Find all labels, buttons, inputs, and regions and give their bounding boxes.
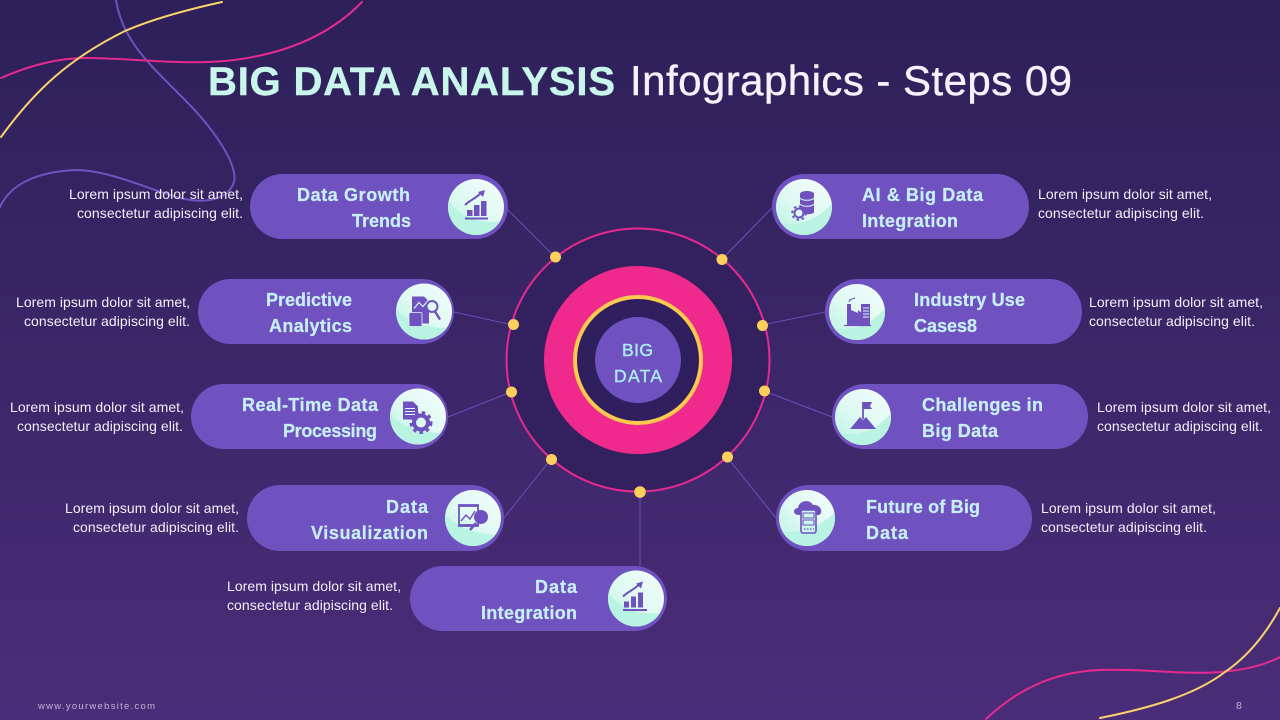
description xyxy=(65,500,239,535)
heading: Industry Use xyxy=(914,290,1025,310)
heading: Cases8 xyxy=(914,316,977,336)
heading: Integration xyxy=(481,603,577,623)
core label xyxy=(614,340,662,386)
icon: database and gear xyxy=(776,179,832,235)
description xyxy=(1041,500,1216,535)
icon: cloud server xyxy=(779,490,835,546)
heading: Real-Time Data xyxy=(242,395,379,415)
description: Lorem ipsum dolor sit amet, xyxy=(1097,399,1271,415)
heading: Data Growth xyxy=(297,185,410,205)
outer ring xyxy=(506,228,770,492)
heading: Data xyxy=(386,497,429,517)
description xyxy=(1089,294,1263,329)
description: Lorem ipsum dolor sit amet, xyxy=(227,578,401,594)
heading: Big Data xyxy=(922,421,999,441)
panel: Challenges in Big Data xyxy=(832,384,1271,449)
connector lines xyxy=(448,205,832,566)
description: consectetur adipiscing elit. xyxy=(1041,519,1207,535)
description: Lorem ipsum dolor sit amet, xyxy=(16,294,190,310)
description: Lorem ipsum dolor sit amet, xyxy=(65,500,239,516)
heading: Processing xyxy=(283,421,377,441)
ring nodes xyxy=(506,252,770,498)
core circle xyxy=(595,317,681,403)
description: consectetur adipiscing elit. xyxy=(1097,418,1263,434)
heading xyxy=(862,185,984,231)
heading: Challenges in xyxy=(922,395,1043,415)
panel: Data Integration xyxy=(227,566,667,631)
description: Lorem ipsum dolor sit amet, xyxy=(10,399,184,415)
footer website: www.yourwebsite.com xyxy=(37,701,155,712)
description: consectetur adipiscing elit. xyxy=(1038,205,1204,221)
heading xyxy=(266,290,352,336)
decorative curves: top left xyxy=(0,0,362,207)
heading xyxy=(914,290,1025,336)
description: consectetur adipiscing elit. xyxy=(17,418,183,434)
description: consectetur adipiscing elit. xyxy=(73,519,239,535)
heading: Predictive xyxy=(266,290,352,310)
heading: Future of Big xyxy=(866,497,980,517)
icon: flag on mountain xyxy=(835,389,891,445)
title xyxy=(208,57,1072,104)
heading xyxy=(866,497,980,543)
heading: Trends xyxy=(352,211,411,231)
heading xyxy=(481,577,578,623)
description: Lorem ipsum dolor sit amet, xyxy=(1089,294,1263,310)
page number: 8 xyxy=(1236,700,1242,712)
description xyxy=(1097,399,1271,434)
description xyxy=(1038,186,1212,221)
title: BIG DATA ANALYSIS xyxy=(208,60,615,104)
pink ring xyxy=(544,266,732,454)
description: Lorem ipsum dolor sit amet, xyxy=(1041,500,1216,516)
panel: Data Visualization xyxy=(65,485,504,551)
icon: analytics report xyxy=(396,284,452,340)
description: consectetur adipiscing elit. xyxy=(227,597,393,613)
heading: Integration xyxy=(862,211,958,231)
heading: Data xyxy=(866,523,909,543)
core label: BIG xyxy=(622,340,653,360)
panel: Future of Big Data xyxy=(776,485,1216,551)
yellow ring xyxy=(575,297,701,423)
panel: AI & Big Data Integration xyxy=(772,174,1212,239)
icon: factory xyxy=(829,284,885,340)
heading: Analytics xyxy=(269,316,352,336)
heading: Visualization xyxy=(311,523,428,543)
panel: Industry Use Cases8 xyxy=(825,279,1263,344)
title: Infographics - Steps 09 xyxy=(630,57,1072,104)
icon: presentation chart and magnifier xyxy=(445,490,501,546)
heading: AI & Big Data xyxy=(862,185,984,205)
description xyxy=(69,186,243,221)
icon: bar chart growth xyxy=(448,179,504,235)
description: Lorem ipsum dolor sit amet, xyxy=(69,186,243,202)
panel: Predictive Analytics xyxy=(16,279,454,344)
central hub diagram xyxy=(506,228,770,498)
description: consectetur adipiscing elit. xyxy=(77,205,243,221)
panel: Real-Time Data Processing xyxy=(10,384,448,449)
decorative curves: bottom right xyxy=(986,608,1280,719)
heading xyxy=(922,395,1043,441)
core label: DATA xyxy=(614,366,662,386)
heading: Data xyxy=(535,577,578,597)
heading xyxy=(297,185,411,231)
icon: bar chart growth xyxy=(608,570,664,626)
heading xyxy=(311,497,429,543)
icon: document and gear xyxy=(390,388,446,444)
description: Lorem ipsum dolor sit amet, xyxy=(1038,186,1212,202)
description: consectetur adipiscing elit. xyxy=(1089,313,1255,329)
description xyxy=(10,399,184,434)
description: consectetur adipiscing elit. xyxy=(24,313,190,329)
panel: Data Growth Trends xyxy=(69,174,508,239)
heading xyxy=(242,395,379,441)
description xyxy=(16,294,190,329)
description xyxy=(227,578,401,613)
